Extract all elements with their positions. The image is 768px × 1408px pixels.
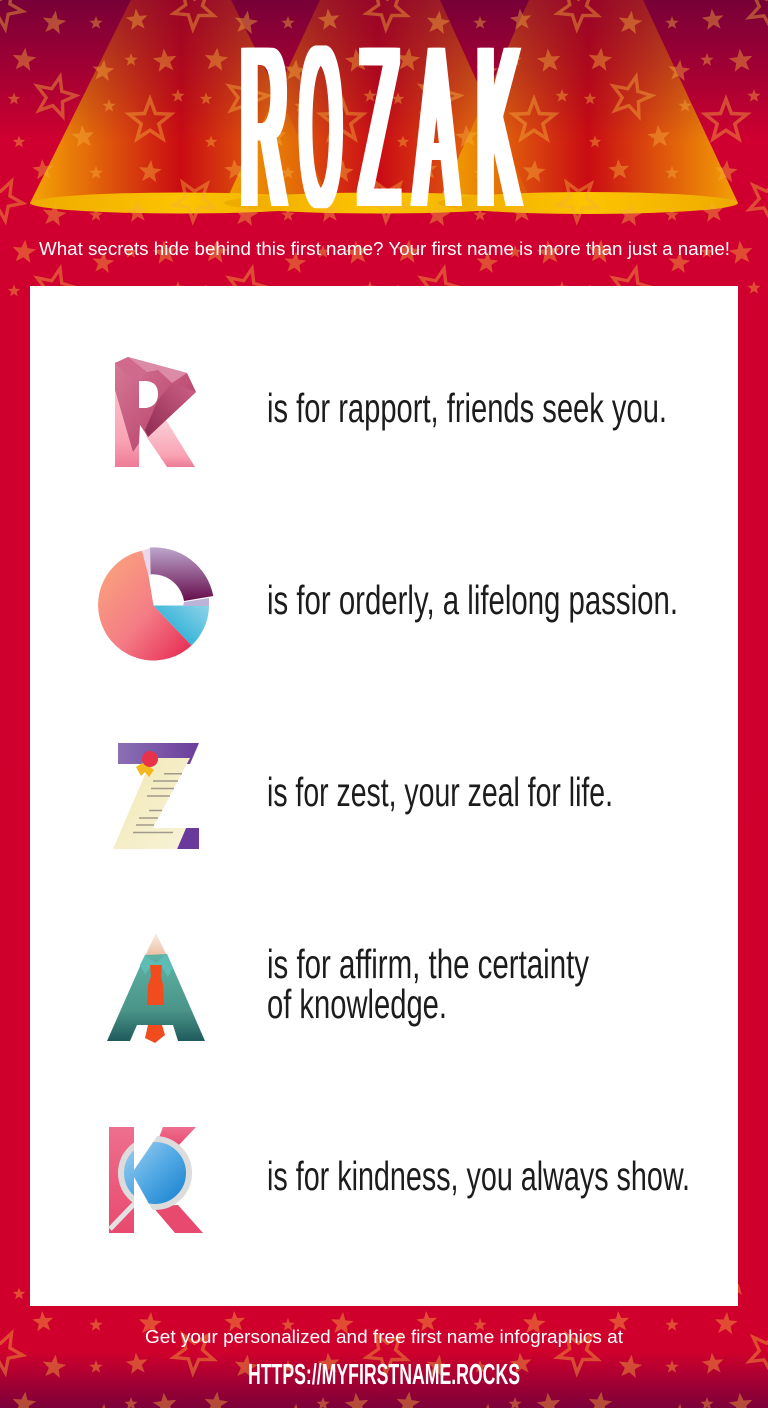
subtitle: What secrets hide behind this first name? Your first name is more than just a name! xyxy=(39,239,730,259)
icon: letter Z with diploma xyxy=(113,743,199,849)
row 4 text xyxy=(267,941,589,1027)
hole of letter R xyxy=(139,381,158,408)
row 4 text: is for affirm, the certainty xyxy=(267,941,589,987)
star pattern top xyxy=(0,0,768,300)
title xyxy=(236,0,524,255)
footer text: Get your personalized and free first name infographics at xyxy=(145,1326,623,1347)
title: O xyxy=(296,0,337,255)
star pattern bottom xyxy=(0,1284,768,1408)
icon: letter K with magnifier xyxy=(109,1127,203,1233)
title: K xyxy=(472,0,514,255)
footer url: HTTPS://MYFIRSTNAME.ROCKS xyxy=(248,1359,520,1391)
panel: white content card xyxy=(30,286,738,1306)
title: A xyxy=(410,0,452,255)
row 4 text: of knowledge. xyxy=(267,981,447,1027)
icon: letter A with tie xyxy=(107,933,205,1043)
spotlight cones xyxy=(30,0,738,214)
title: Z xyxy=(355,0,393,255)
title: R xyxy=(236,0,281,255)
row 3 text: is for zest, your zeal for life. xyxy=(267,769,613,815)
icon: letter R with gem xyxy=(115,357,196,467)
icon: pie chart xyxy=(98,547,213,660)
